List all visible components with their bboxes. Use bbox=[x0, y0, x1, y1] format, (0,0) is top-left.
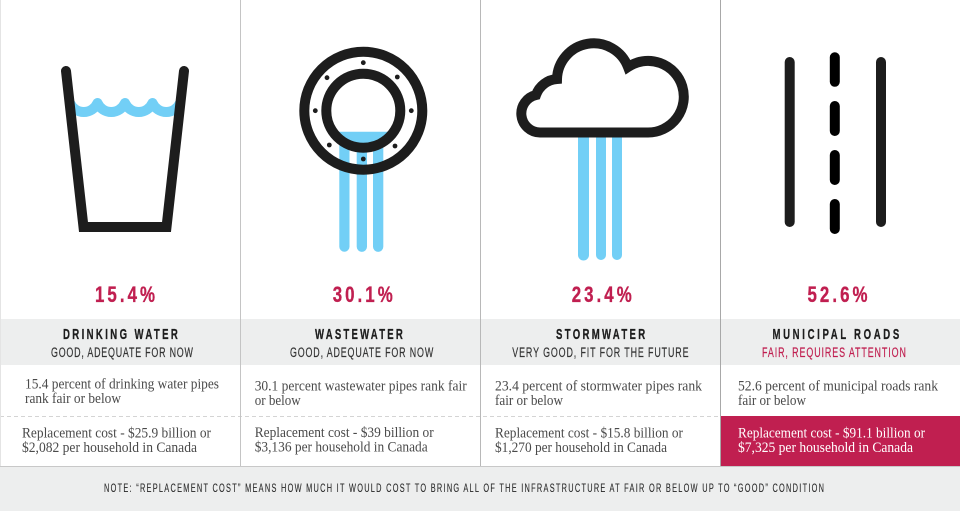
percentage: 23.4% bbox=[572, 283, 632, 308]
rating: GOOD, ADEQUATE FOR NOW bbox=[51, 346, 193, 361]
replacement cost text bbox=[22, 426, 211, 456]
icon: glass of water bbox=[66, 71, 184, 227]
heading: STORMWATER bbox=[556, 326, 645, 343]
replacement cost text: Replacement cost - $25.9 billion or bbox=[22, 426, 211, 442]
condition text bbox=[738, 378, 939, 409]
icon: pipe cross-section bbox=[304, 52, 422, 252]
note text: NOTE: “REPLACEMENT COST” MEANS HOW MUCH IT WOULD COST TO BRING ALL OF THE INFRASTRUCTURE AT FAIR OR BELOW UP TO “GOOD” CONDITION bbox=[104, 482, 824, 496]
condition text bbox=[255, 378, 467, 409]
replacement cost text: $3,136 per household in Canada bbox=[255, 440, 428, 456]
percentage: 30.1% bbox=[333, 283, 393, 308]
icon: rain cloud bbox=[521, 43, 684, 261]
heading: DRINKING WATER bbox=[63, 326, 178, 343]
panel: municipal roads bbox=[721, 52, 960, 466]
heading: MUNICIPAL ROADS bbox=[772, 326, 899, 343]
replacement cost highlight: $7,325 per household in Canada bbox=[738, 440, 914, 456]
replacement cost text: $1,270 per household in Canada bbox=[495, 440, 668, 456]
rating: GOOD, ADEQUATE FOR NOW bbox=[290, 346, 433, 361]
panel: drinking water bbox=[0, 71, 240, 456]
condition text: 23.4 percent of stormwater pipes rank bbox=[495, 378, 703, 394]
replacement cost highlight bbox=[721, 416, 960, 466]
panel: stormwater bbox=[481, 43, 720, 456]
footnote band bbox=[0, 466, 960, 511]
replacement cost text bbox=[255, 425, 434, 456]
percentage: 15.4% bbox=[95, 283, 155, 308]
replacement cost highlight: Replacement cost - $91.1 billion or bbox=[738, 426, 925, 442]
condition text: 15.4 percent of drinking water pipes bbox=[25, 376, 219, 392]
condition text bbox=[495, 378, 703, 409]
percentage: 52.6% bbox=[808, 283, 868, 308]
replacement cost text: Replacement cost - $39 billion or bbox=[255, 425, 434, 441]
panel: wastewater bbox=[241, 52, 480, 456]
icon: road bbox=[785, 52, 886, 234]
rating: VERY GOOD, FIT FOR THE FUTURE bbox=[512, 346, 689, 361]
condition text: rank fair or below bbox=[25, 391, 121, 407]
replacement cost text: $2,082 per household in Canada bbox=[22, 440, 198, 456]
condition text: fair or below bbox=[738, 393, 806, 409]
condition text bbox=[25, 376, 219, 407]
condition text: 52.6 percent of municipal roads rank bbox=[738, 378, 939, 394]
condition text: fair or below bbox=[495, 393, 563, 409]
replacement cost text: Replacement cost - $15.8 billion or bbox=[495, 426, 683, 442]
condition text: 30.1 percent wastewater pipes rank fair bbox=[255, 378, 467, 394]
replacement cost text bbox=[495, 426, 683, 456]
heading: WASTEWATER bbox=[315, 326, 403, 343]
rating: FAIR, REQUIRES ATTENTION bbox=[762, 346, 906, 361]
condition text: or below bbox=[255, 393, 301, 409]
